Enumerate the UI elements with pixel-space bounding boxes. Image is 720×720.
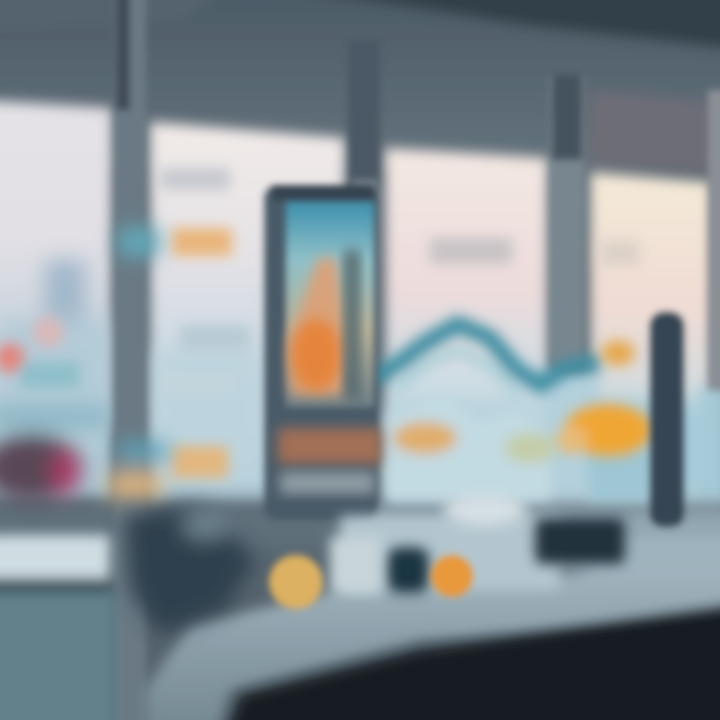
desk objects	[269, 494, 625, 609]
pale pedestal	[330, 537, 380, 593]
left chair silhouette	[125, 505, 255, 635]
small dark cup	[387, 547, 429, 593]
lower mountain chart area	[385, 340, 650, 500]
yellow ball on left	[269, 555, 323, 609]
dark strip beside tower	[344, 250, 360, 400]
orange ball on right	[431, 555, 473, 597]
column markers	[108, 228, 168, 498]
device screen	[286, 202, 374, 407]
left pie and colour markers	[0, 317, 80, 388]
device top edge	[272, 186, 374, 200]
dark foliage and pink marker at left	[0, 405, 110, 502]
dark box on desk	[535, 518, 625, 564]
window panes	[0, 100, 720, 505]
tablet or phone device	[264, 186, 382, 520]
orange semicircle chart	[556, 404, 652, 456]
desk surface	[0, 516, 720, 720]
white cup	[443, 494, 527, 526]
label: orange tag	[172, 228, 232, 256]
floating chart labels	[160, 168, 640, 391]
distant skyline	[0, 260, 710, 490]
label: mid pale text bars	[165, 325, 250, 391]
label: upper pale text bars	[160, 168, 640, 266]
orange-brown band on device	[278, 428, 382, 464]
orange tower on screen	[290, 258, 346, 395]
light band on device	[280, 472, 375, 494]
ceiling	[0, 0, 720, 175]
dark upright device at right	[650, 312, 684, 528]
line chart: teal wave	[372, 324, 600, 395]
orange bar lower left	[172, 446, 228, 478]
device body	[264, 186, 378, 520]
tower highlight	[291, 319, 341, 391]
dark foreground under desk	[225, 605, 720, 720]
desk back wall	[0, 500, 720, 550]
